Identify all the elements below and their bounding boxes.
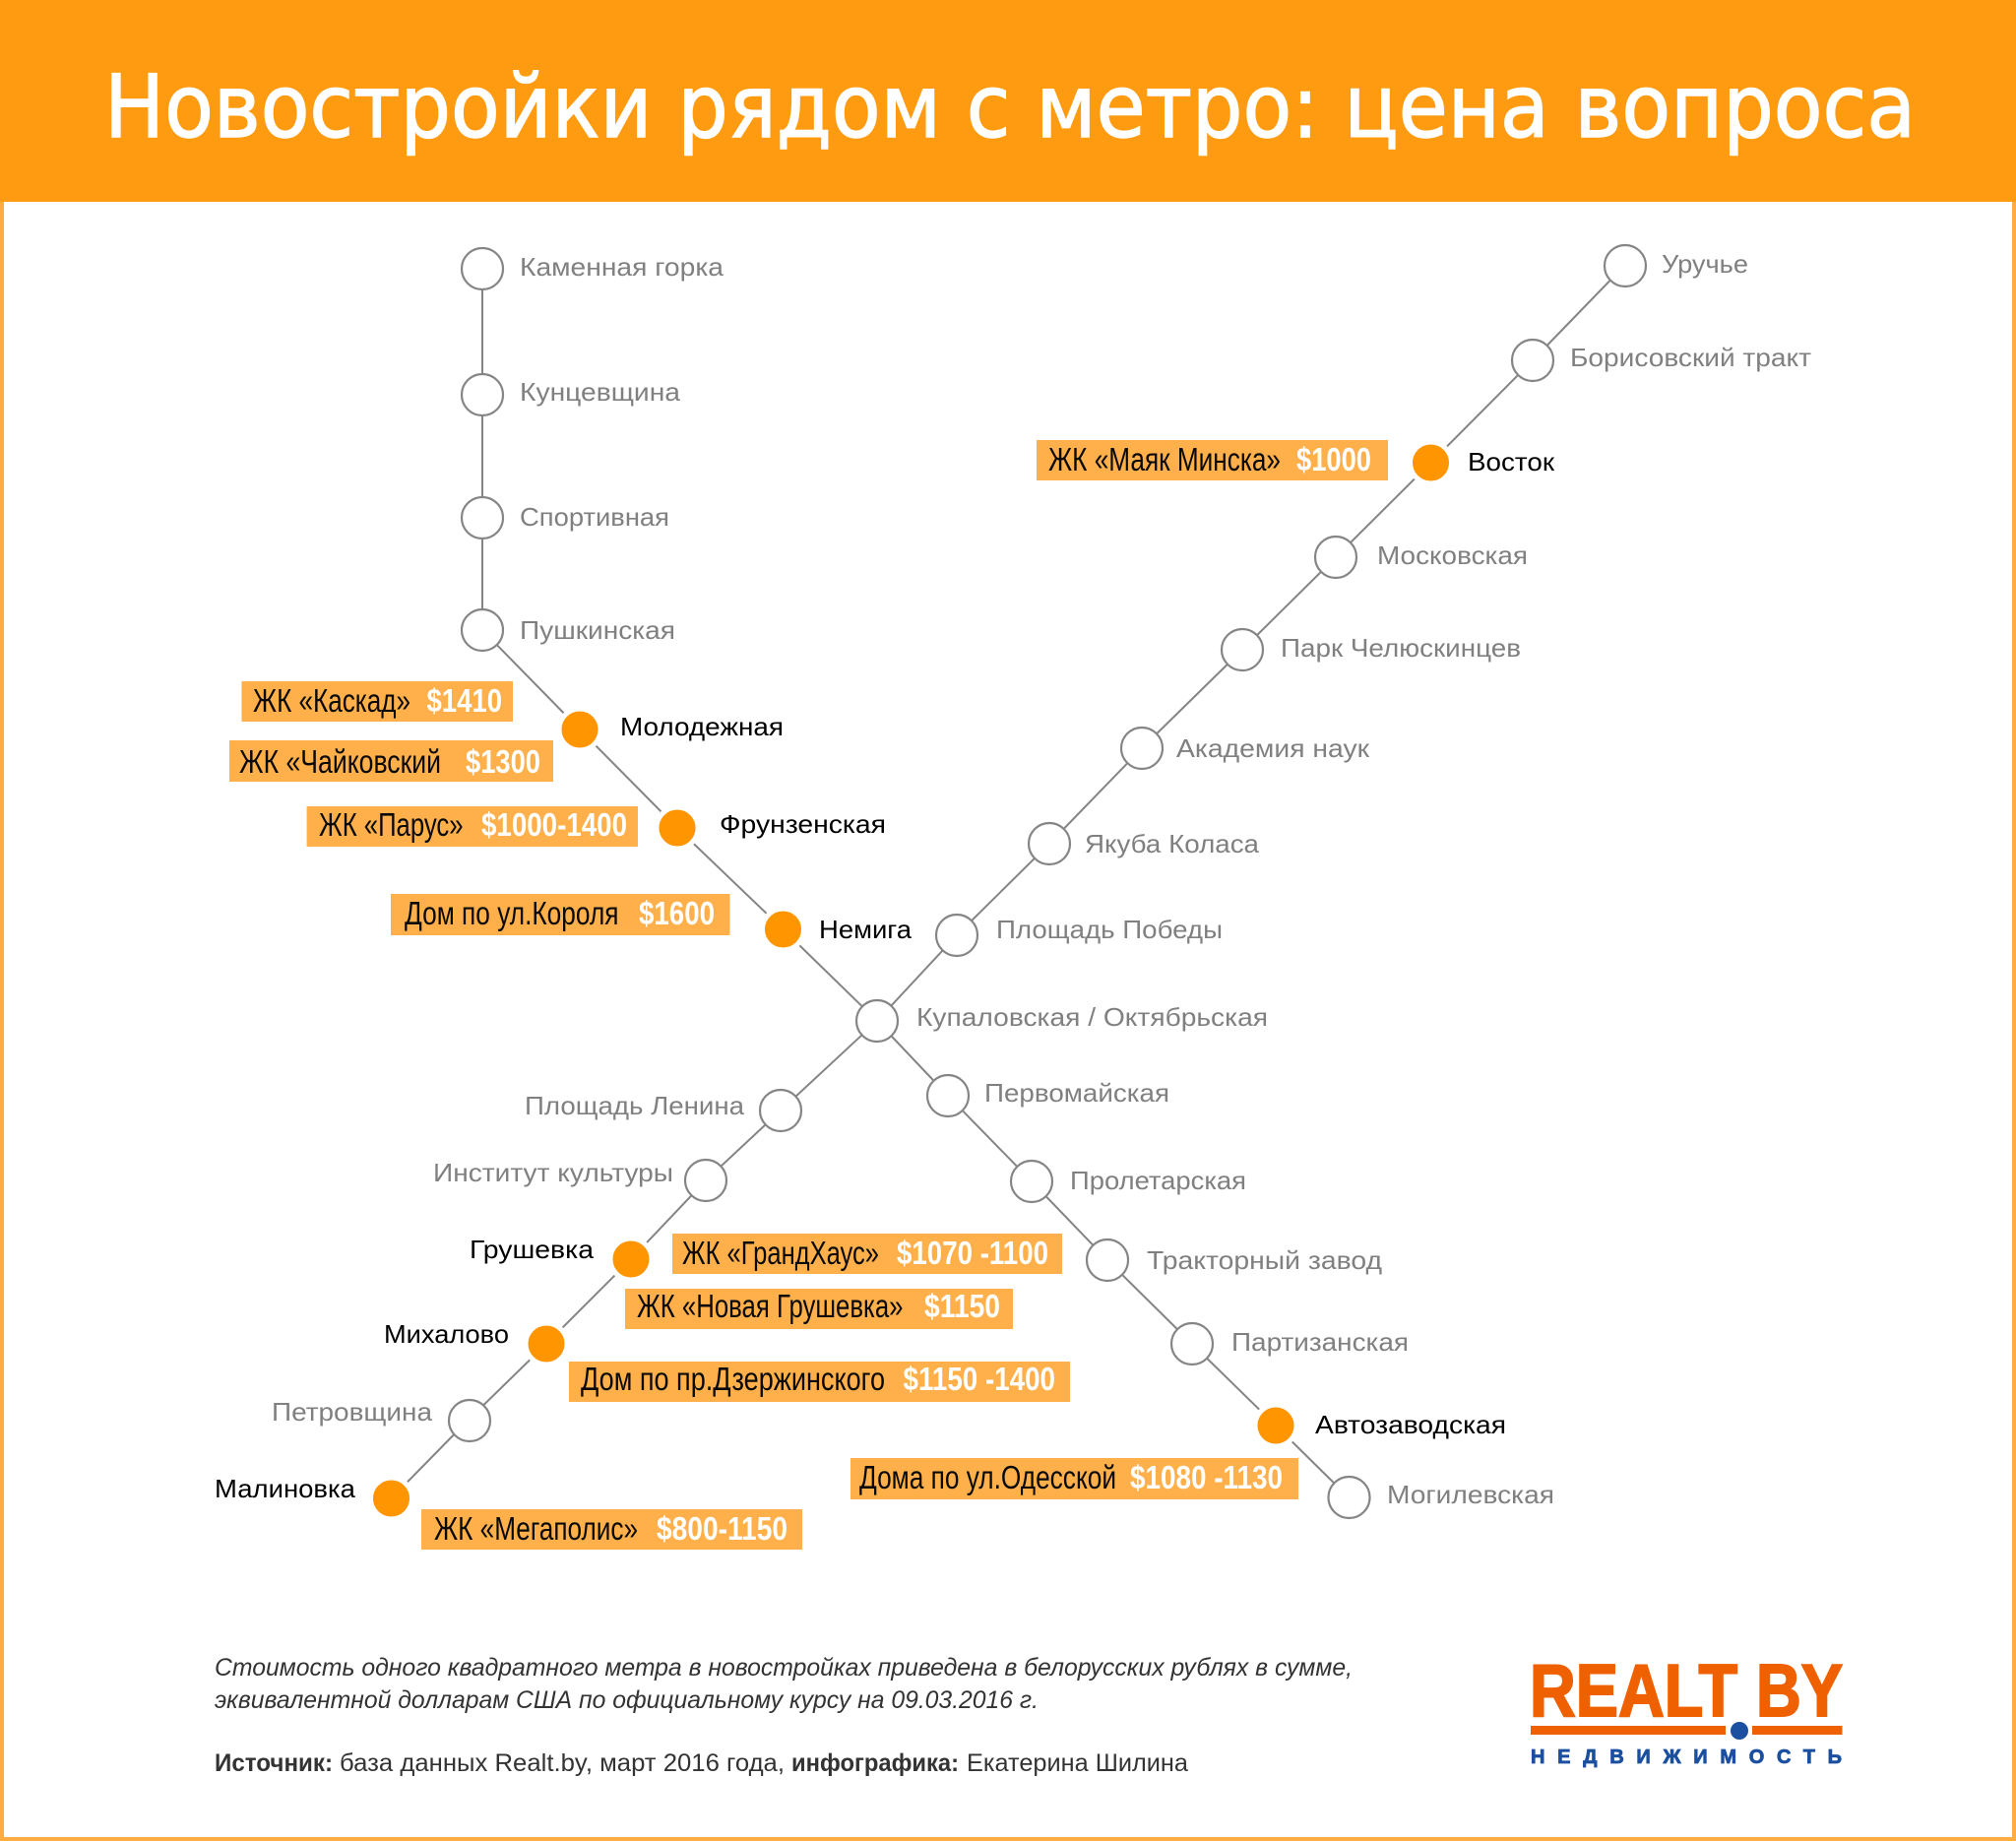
station: Фрунзенская — [657, 807, 886, 849]
station: Академия наук: Академия наук — [1176, 733, 1370, 763]
station: Московская — [1315, 537, 1528, 578]
callout: Дом по пр.Дзержинского: Дом по пр.Дзержинского — [581, 1361, 885, 1397]
logo: Realt.by: BY — [1756, 1649, 1843, 1732]
station: Восток: Восток — [1468, 447, 1555, 476]
station: Уручье: Уручье — [1662, 249, 1748, 279]
station: Партизанская: Партизанская — [1231, 1327, 1409, 1357]
station: Петровщина: Петровщина — [272, 1397, 433, 1427]
station: Грушевка: Грушевка — [470, 1235, 595, 1264]
footnote — [215, 1654, 1353, 1714]
station: Первомайская — [927, 1075, 1169, 1116]
station: Кунцевщина — [462, 374, 681, 415]
station: Спортивная — [462, 497, 669, 539]
station: Купаловская / Октябрьская: Купаловская / Октябрьская — [916, 1002, 1268, 1032]
callout: ЖК ГрандХаус — [672, 1234, 1062, 1274]
station: Якуба Коласа — [1029, 823, 1260, 864]
callout: ЖК ГрандХаус: $1070 -1100 — [897, 1235, 1048, 1271]
callout: Дом по пр.Дзержинского — [569, 1361, 1070, 1402]
station: Молодежная — [559, 709, 784, 750]
station: Михалово: Михалово — [384, 1319, 509, 1349]
source line: Екатерина Шилина — [967, 1749, 1188, 1777]
callout: ЖК Новая Грушевка: $1150 — [924, 1288, 1000, 1324]
station: Площадь Ленина — [525, 1090, 801, 1131]
callout: ЖК Парус: $1000-1400 — [481, 806, 627, 843]
callout: Дом по ул.Короля: Дом по ул.Короля — [405, 895, 618, 931]
station: Парк Челюскинцев — [1222, 629, 1521, 670]
station: Тракторный завод: Тракторный завод — [1147, 1245, 1382, 1275]
callout: Дом по ул.Короля: $1600 — [639, 895, 715, 931]
station: Петровщина — [272, 1397, 490, 1441]
callout: Дом по ул.Короля — [391, 894, 730, 935]
station: Каменная горка: Каменная горка — [520, 252, 724, 282]
price callouts — [229, 440, 1388, 1550]
callout: ЖК ГрандХаус: ЖК «ГрандХаус» — [682, 1235, 879, 1271]
source line: Источник: — [215, 1749, 333, 1777]
callout: Дома по ул.Одесской: Дома по ул.Одесской — [859, 1459, 1116, 1495]
logo: Realt.by: НЕДВИЖИМОСТЬ — [1531, 1746, 1842, 1768]
metro map — [215, 245, 1811, 1519]
callout: ЖК Мегаполис — [421, 1509, 802, 1550]
station: Автозаводская: Автозаводская — [1315, 1410, 1506, 1439]
station: Институт культуры — [433, 1158, 726, 1201]
station: Могилевская: Могилевская — [1387, 1480, 1554, 1509]
station: Площадь Победы: Площадь Победы — [996, 915, 1223, 944]
callout: ЖК Маяк Минска: $1000 — [1296, 441, 1371, 477]
footnote: Стоимость одного квадратного метра в новостройках приведена в белорусских рублях в сумме, — [215, 1654, 1353, 1682]
logo: Realt.by: REALT — [1530, 1649, 1737, 1732]
logo: Realt.by — [1530, 1649, 1843, 1768]
station: Пролетарская: Пролетарская — [1070, 1166, 1246, 1195]
station: Купаловская / Октябрьская — [856, 1000, 1268, 1042]
station: Восток — [1410, 442, 1555, 483]
station: Пролетарская — [1011, 1161, 1246, 1202]
line: Moskovskaya line — [482, 269, 1349, 1497]
callout: ЖК Каскад — [242, 681, 513, 722]
station: Молодежная: Молодежная — [620, 712, 784, 741]
station: Кунцевщина: Кунцевщина — [520, 377, 681, 407]
station: Институт культуры: Институт культуры — [433, 1158, 673, 1187]
station: Спортивная: Спортивная — [520, 502, 669, 532]
callout: ЖК Новая Грушевка: ЖК «Новая Грушевка» — [637, 1288, 904, 1324]
station: Первомайская: Первомайская — [984, 1078, 1169, 1108]
callout: Дом по пр.Дзержинского: $1150 -1400 — [904, 1361, 1055, 1397]
line: Avtozavodskaya line — [392, 266, 1624, 1498]
station: Михалово — [384, 1319, 567, 1365]
station: Уручье — [1605, 245, 1748, 286]
station: Фрунзенская: Фрунзенская — [720, 809, 886, 839]
station: Партизанская — [1171, 1323, 1409, 1365]
station: Якуба Коласа: Якуба Коласа — [1085, 829, 1260, 858]
callout: Дома по ул.Одесской — [850, 1458, 1298, 1499]
callout: ЖК Мегаполис: ЖК «Мегаполис» — [434, 1510, 638, 1547]
footnote: эквивалентной долларам США по официальному курсу на 09.03.2016 г. — [215, 1686, 1039, 1714]
station: Немига: Немига — [819, 915, 913, 944]
callout: ЖК Парус — [307, 806, 638, 847]
callout: ЖК Чайковский: $1300 — [466, 743, 540, 780]
station: Малиновка — [215, 1474, 411, 1519]
station: Каменная горка — [462, 248, 724, 289]
station: Грушевка — [470, 1235, 652, 1280]
station: Могилевская — [1329, 1477, 1554, 1518]
callout: ЖК Маяк Минска: ЖК «Маяк Минска» — [1048, 441, 1281, 477]
station: Тракторный завод — [1087, 1239, 1382, 1281]
callout: ЖК Парус: ЖК «Парус» — [319, 806, 463, 843]
callout: ЖК Чайковский — [229, 740, 553, 782]
header banner — [0, 0, 2016, 202]
callout: ЖК Чайковский: ЖК «Чайковский — [239, 743, 441, 780]
callout: ЖК Каскад: $1410 — [427, 682, 502, 719]
station: Борисовский тракт: Борисовский тракт — [1570, 343, 1811, 372]
title: Новостройки рядом с метро: цена вопроса — [104, 56, 1916, 158]
source line: инфографика: — [791, 1749, 959, 1777]
station: Автозаводская — [1255, 1405, 1506, 1446]
station: Малиновка: Малиновка — [215, 1474, 356, 1503]
station: Немига — [762, 909, 913, 950]
callout: ЖК Каскад: ЖК «Каскад» — [253, 682, 410, 719]
callout: Дома по ул.Одесской: $1080 -1130 — [1130, 1459, 1283, 1495]
station: Борисовский тракт — [1512, 340, 1811, 381]
callout: ЖК Мегаполис: $800-1150 — [657, 1510, 788, 1547]
station: Парк Челюскинцев: Парк Челюскинцев — [1281, 633, 1521, 663]
source line: база данных Realt.by, март 2016 года, — [340, 1749, 785, 1777]
source line — [215, 1749, 1188, 1777]
station: Академия наук — [1121, 728, 1370, 769]
station: Московская: Московская — [1377, 540, 1528, 570]
station: Пушкинская — [462, 609, 675, 651]
station: Пушкинская: Пушкинская — [520, 615, 675, 645]
station: Площадь Ленина: Площадь Ленина — [525, 1091, 745, 1120]
station: Площадь Победы — [936, 915, 1223, 956]
